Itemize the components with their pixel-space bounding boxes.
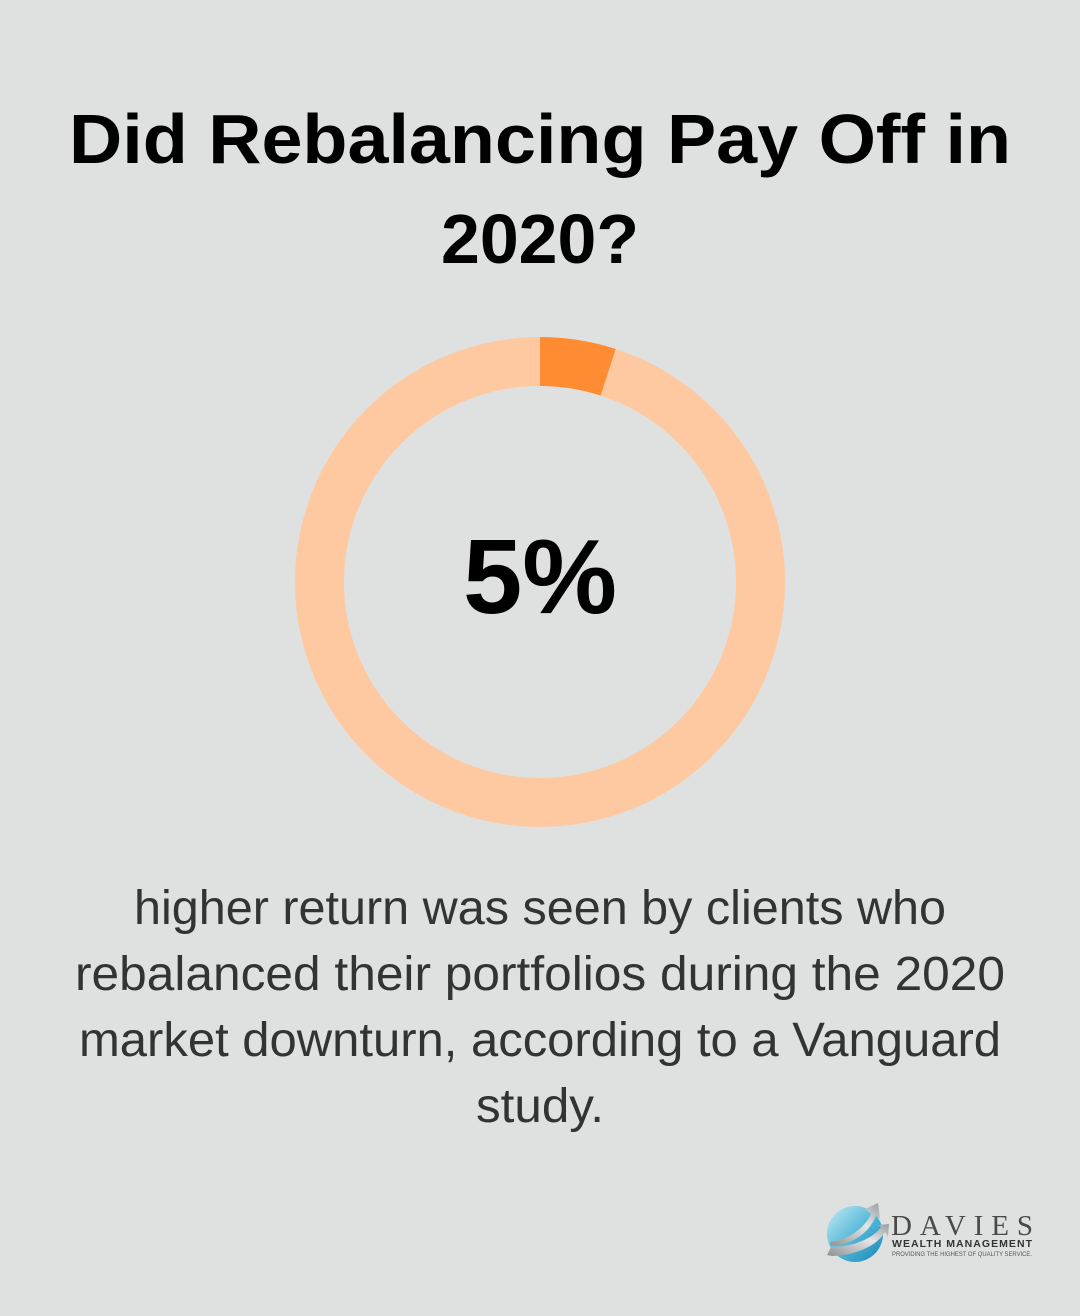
- tagline: PROVIDING THE HIGHEST OF QUALITY SERVICE.: [892, 1251, 1032, 1258]
- highlighted segment: [540, 337, 616, 396]
- value label: 5%: [463, 518, 617, 636]
- title: [69, 100, 1011, 278]
- ring track: [320, 362, 760, 802]
- description text: rebalanced their portfolios during the 2020: [75, 948, 1005, 1001]
- title: 2020?: [441, 200, 639, 278]
- icon: globe with arrows: [827, 1203, 889, 1262]
- donut chart: 5%: [320, 337, 760, 802]
- logo: Davies Wealth Management: [827, 1203, 1033, 1262]
- title: Did Rebalancing Pay Off in: [69, 100, 1011, 178]
- wordmark: DAVIES: [891, 1210, 1033, 1242]
- description text: higher return was seen by clients who: [134, 882, 946, 935]
- description text: study.: [476, 1080, 604, 1133]
- wordmark subtitle: WEALTH MANAGEMENT: [892, 1238, 1033, 1250]
- description text: market downturn, according to a Vanguard: [79, 1014, 1001, 1067]
- description text: [75, 882, 1005, 1133]
